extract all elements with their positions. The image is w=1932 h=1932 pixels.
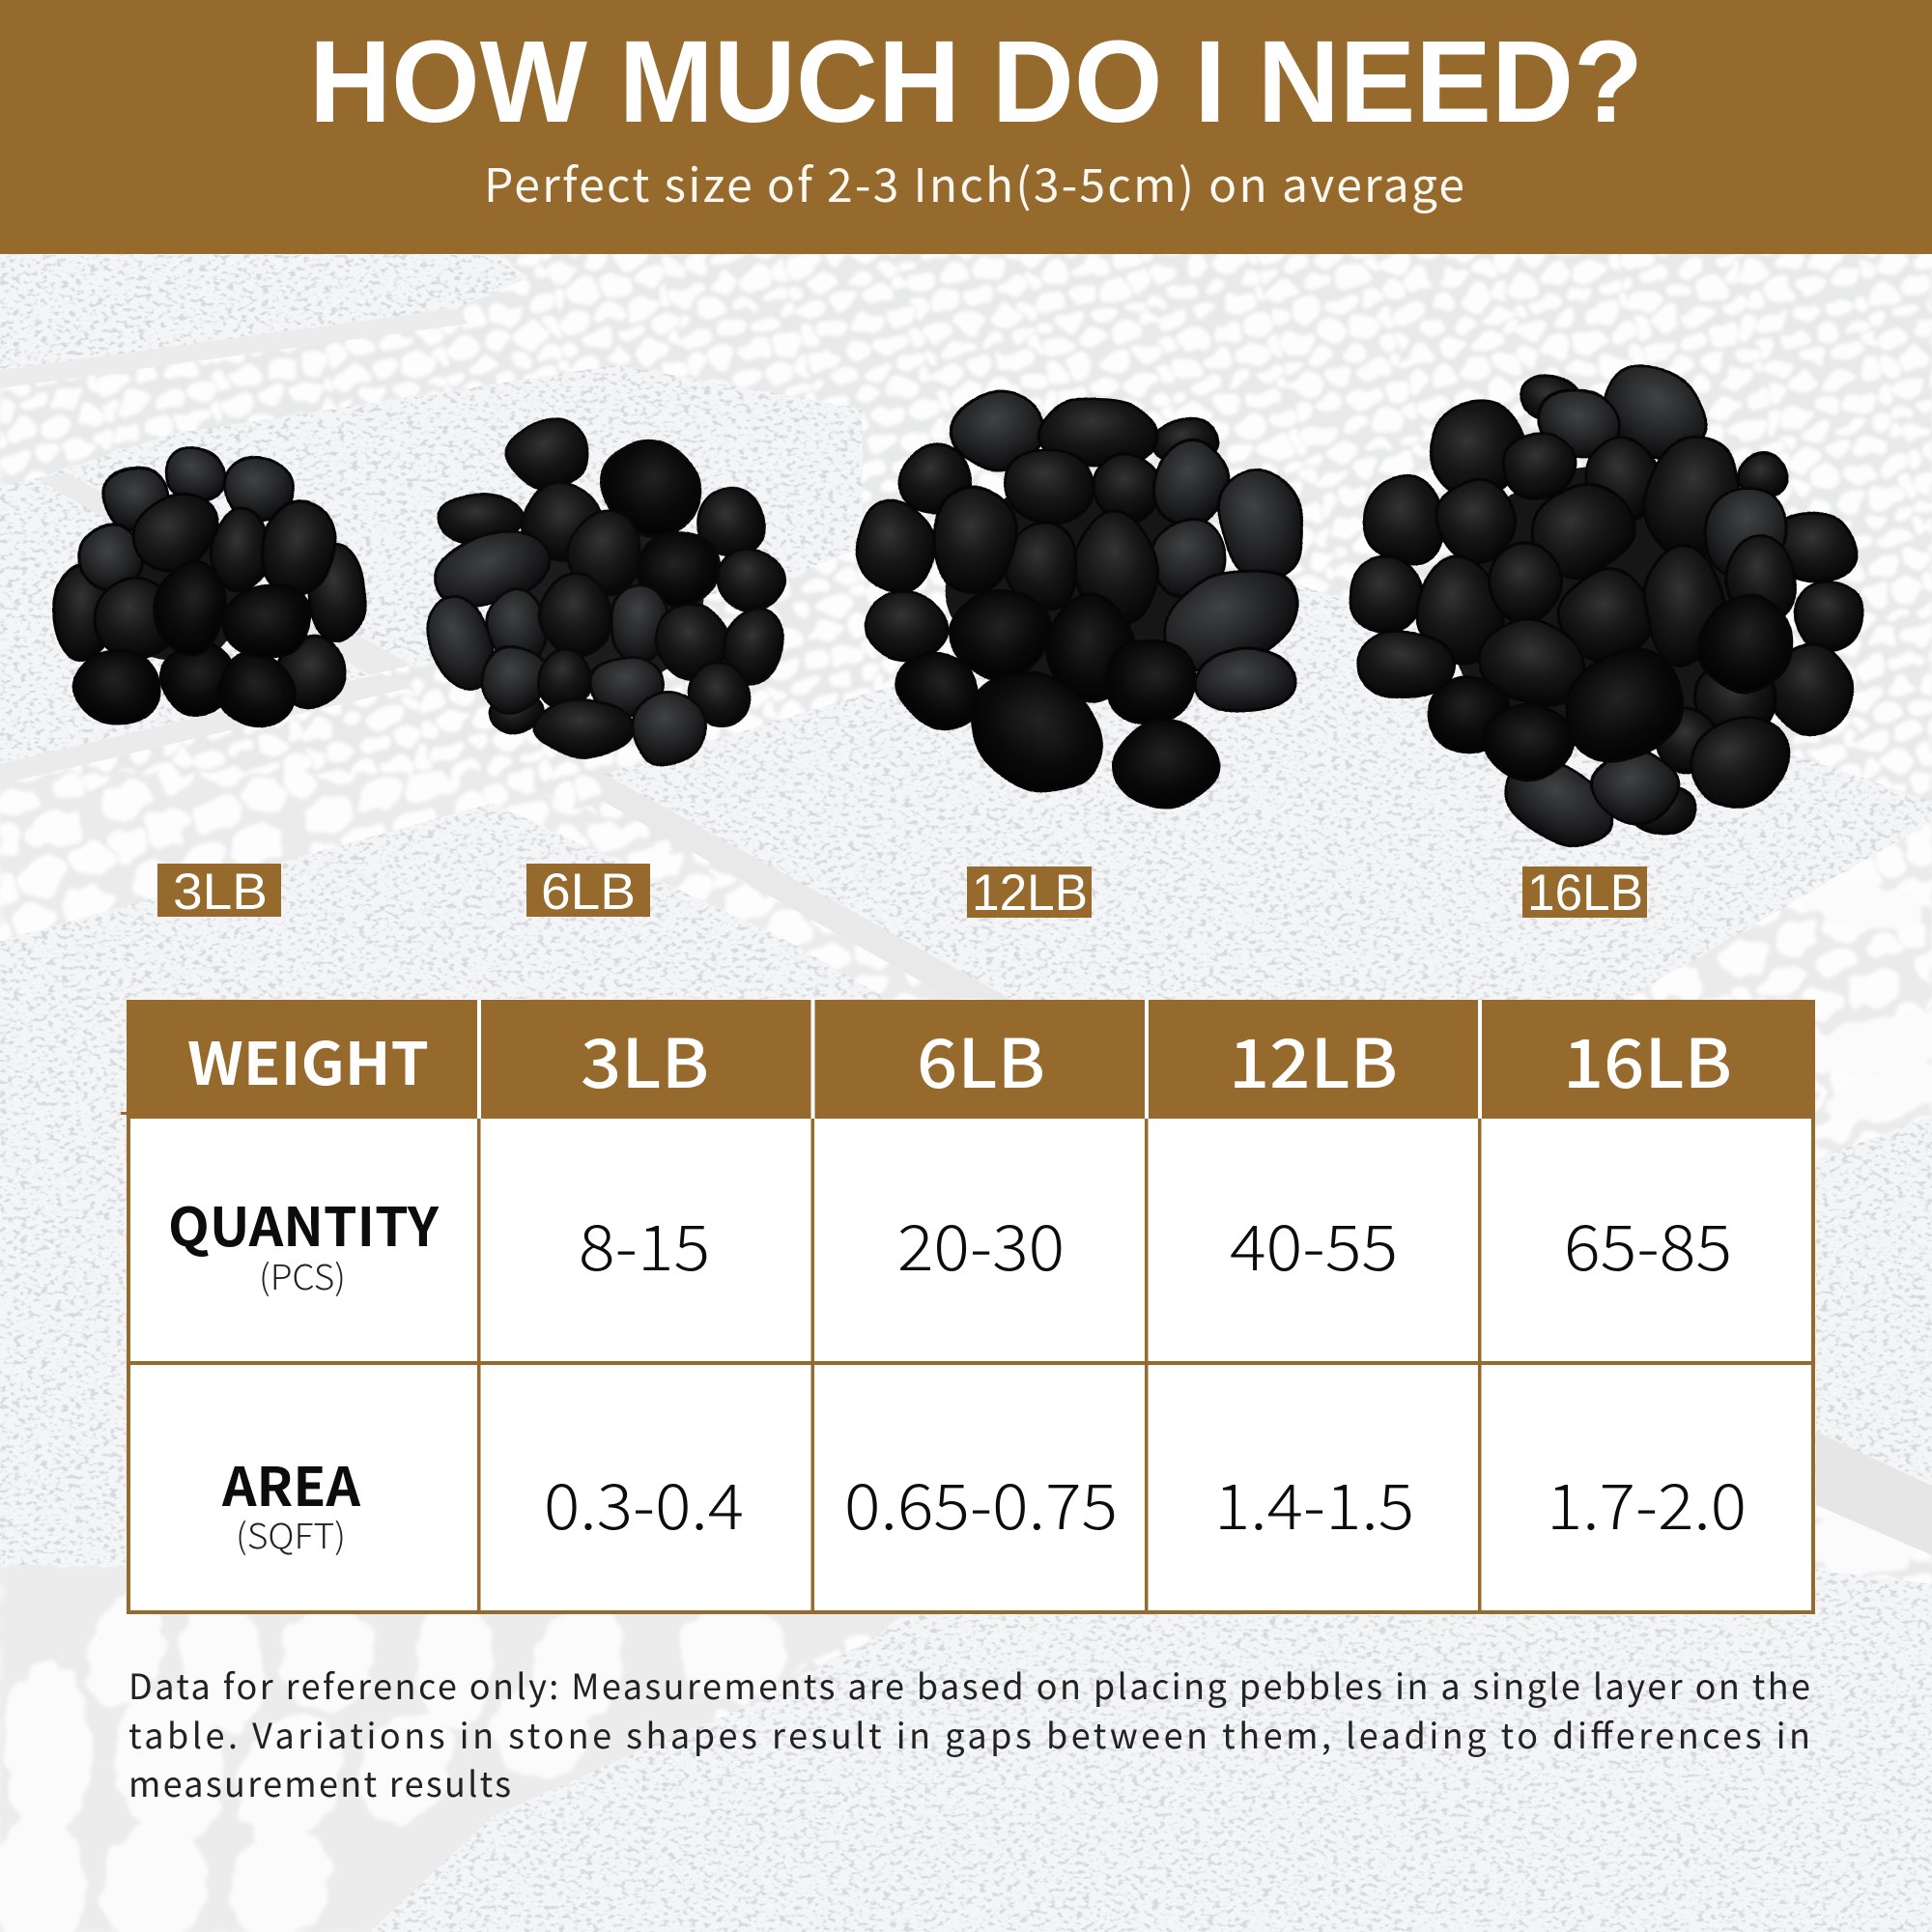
footnote (128, 1660, 1810, 1807)
area row: 0.65-0.75 (844, 1457, 1118, 1548)
pebble pile: 12LB (853, 392, 1313, 813)
table header row (187, 1010, 1732, 1108)
pebble pile: 16LB (1352, 349, 1869, 864)
area row: (SQFT) (236, 1509, 346, 1559)
pebble pile: 3LB (53, 448, 363, 740)
footnote: Data for reference only: Measurements are based on placing pebbles in a single layer on the (128, 1660, 1810, 1710)
weight tag: 3LB: 3LB (173, 864, 268, 921)
quantity row: 8-15 (579, 1198, 710, 1289)
data table (121, 1000, 1815, 1614)
quantity row: 40-55 (1230, 1198, 1398, 1289)
quantity row: QUANTITY (168, 1184, 440, 1262)
area row: AREA (221, 1444, 361, 1521)
area row: 1.7-2.0 (1547, 1457, 1747, 1548)
table header row: 16LB (1563, 1010, 1732, 1108)
quantity row (168, 1184, 1732, 1300)
pebble pile: 6LB (422, 421, 784, 765)
table header row: 12LB (1229, 1010, 1398, 1108)
area row: 1.4-1.5 (1214, 1457, 1414, 1548)
title: HOW MUCH DO I NEED? (309, 15, 1643, 147)
footnote: measurement results (128, 1757, 511, 1807)
header banner (0, 0, 1932, 254)
weight tag: 6LB: 6LB (541, 864, 636, 921)
quantity row: 65-85 (1564, 1198, 1732, 1289)
table header row: 3LB (581, 1010, 709, 1108)
area row (221, 1444, 1747, 1559)
weight tag: 16LB: 16LB (1527, 865, 1643, 922)
table header row: 6LB (917, 1010, 1045, 1108)
subtitle: Perfect size of 2-3 Inch(3-5cm) on average (484, 148, 1464, 215)
quantity row: (PCS) (259, 1250, 346, 1300)
footnote: table. Variations in stone shapes result in gaps between them, leading to differences in (128, 1709, 1810, 1759)
area row: 0.3-0.4 (544, 1457, 744, 1548)
table header row: WEIGHT (187, 1016, 429, 1102)
quantity row: 20-30 (897, 1198, 1065, 1289)
weight tag: 12LB: 12LB (972, 865, 1088, 922)
